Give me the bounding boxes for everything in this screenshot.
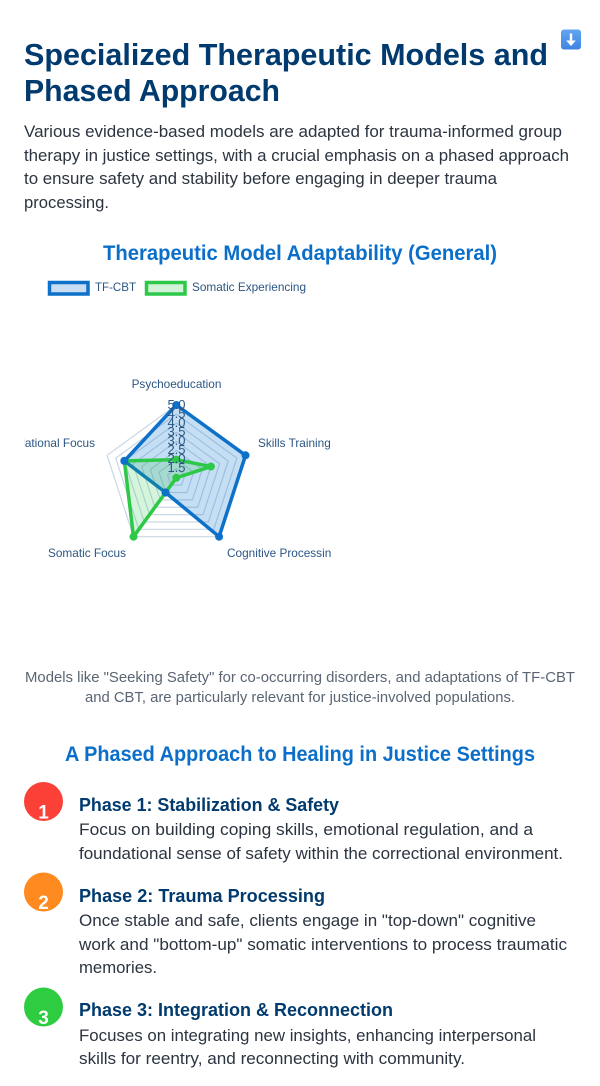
icon: number 1 badge: 1 bbox=[38, 802, 49, 824]
title: Phased Approach bbox=[24, 73, 280, 108]
intro text block: to ensure safety and stability before engaging in deeper trauma bbox=[24, 169, 498, 188]
phase 2 title: Phase 2: Trauma Processing bbox=[79, 885, 325, 906]
legend: TF-CBT bbox=[95, 280, 136, 294]
series: TF-CBT bbox=[120, 401, 250, 541]
intro text block: processing. bbox=[24, 193, 109, 212]
phase 1 description: Focus on building coping skills, emotional regulation, and a bbox=[79, 820, 534, 839]
radar scale ticks: 3.5 bbox=[167, 424, 186, 439]
icon: number 1 badge bbox=[24, 782, 63, 824]
radar scale ticks: 1.5 bbox=[167, 460, 186, 475]
radar axis labels: Relational Focus bbox=[7, 436, 95, 450]
phase 2 bbox=[24, 872, 568, 977]
radar axis labels bbox=[7, 377, 338, 560]
phase 2 description: Once stable and safe, clients engage in "top-down" cognitive bbox=[79, 911, 536, 930]
phase 1 bbox=[24, 782, 563, 863]
radar scale ticks: 3.0 bbox=[167, 433, 186, 448]
intro text block: therapy in justice settings, with a crucial emphasis on a phased approach bbox=[24, 146, 569, 165]
phase 2 description bbox=[78, 911, 568, 977]
phase 1 description: foundational sense of safety within the correctional environment. bbox=[79, 844, 563, 863]
intro text block bbox=[24, 122, 569, 212]
phase 3 bbox=[24, 988, 536, 1068]
chart caption: and CBT, are particularly relevant for justice-involved populations. bbox=[85, 690, 515, 706]
phase 1 title: Phase 1: Stabilization & Safety bbox=[79, 794, 340, 815]
phase 3 title: Phase 3: Integration & Reconnection bbox=[79, 999, 393, 1020]
chart caption: Models like "Seeking Safety" for co-occurring disorders, and adaptations of TF-CBT bbox=[25, 670, 575, 686]
series: Somatic Experiencing bbox=[120, 456, 215, 541]
radar scale ticks: 4.5 bbox=[167, 406, 186, 421]
phase 3 description bbox=[79, 1026, 536, 1068]
radar chart bbox=[7, 280, 338, 560]
chart caption bbox=[25, 670, 575, 706]
icon: number 2 badge bbox=[24, 872, 63, 914]
phases heading: A Phased Approach to Healing in Justice Settings bbox=[65, 743, 535, 766]
phase 2 description: memories. bbox=[79, 958, 157, 977]
phase 1 description bbox=[79, 820, 563, 863]
radar grid bbox=[107, 405, 246, 537]
title bbox=[24, 37, 548, 108]
icon: number 2 badge: 2 bbox=[38, 893, 49, 914]
icon: number 3 badge: 3 bbox=[38, 1008, 49, 1029]
radar axis labels: Skills Training bbox=[258, 436, 331, 450]
icon: number 3 badge bbox=[24, 988, 63, 1029]
radar scale ticks: 2.5 bbox=[167, 442, 186, 457]
title: Specialized Therapeutic Models and bbox=[24, 37, 548, 72]
radar scale ticks: 4.0 bbox=[167, 415, 186, 430]
radar scale ticks: 5.0 bbox=[167, 397, 186, 412]
legend: Somatic Experiencing bbox=[192, 280, 306, 294]
radar axis labels: Psychoeducation bbox=[132, 377, 221, 391]
radar axis labels: Cognitive Processing bbox=[227, 546, 338, 560]
phase 3 description: skills for reentry, and reconnecting with community. bbox=[79, 1049, 465, 1068]
legend bbox=[50, 280, 306, 294]
radar scale ticks bbox=[167, 397, 186, 475]
icon: down arrow button bbox=[561, 30, 581, 50]
radar axis labels: Somatic Focus bbox=[48, 546, 126, 560]
radar scale ticks: 2.0 bbox=[167, 451, 186, 466]
chart heading: Therapeutic Model Adaptability (General) bbox=[103, 242, 497, 265]
phase 2 description: work and "bottom-up" somatic interventions to process traumatic bbox=[78, 935, 568, 954]
phase 3 description: Focuses on integrating new insights, enhancing interpersonal bbox=[79, 1026, 536, 1045]
intro text block: Various evidence-based models are adapted for trauma-informed group bbox=[24, 122, 562, 141]
